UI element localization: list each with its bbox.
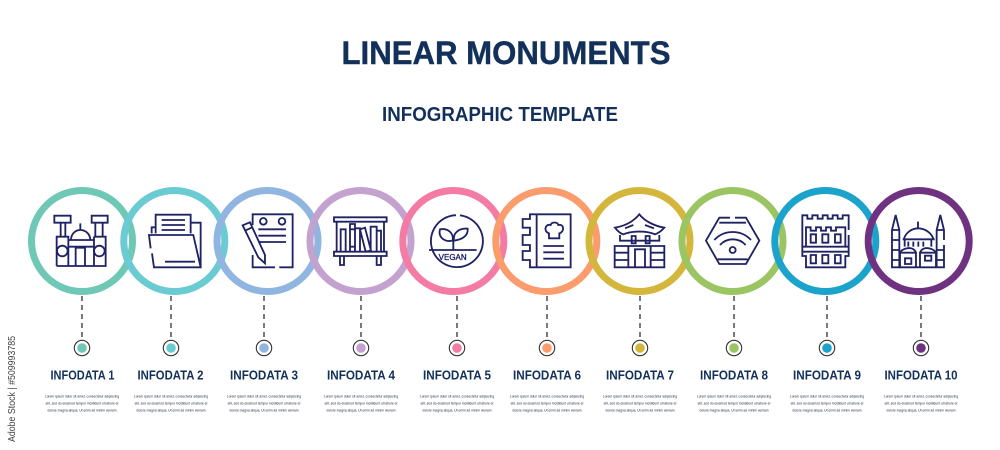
item 8 text bbox=[697, 368, 771, 412]
item 1 text: INFODATA 1 bbox=[50, 368, 114, 382]
item 5 text bbox=[420, 368, 494, 412]
item 3 text bbox=[227, 368, 301, 412]
item 7 text bbox=[603, 368, 677, 412]
item 9 text: Lorem ipsum dolor sit amet, consectetur adipiscing bbox=[790, 394, 864, 398]
item 7 text: elit, sed do eiusmod tempor incididunt ut labore et bbox=[604, 402, 676, 406]
icon: bookshelf bbox=[334, 217, 387, 265]
icon: vegan badge bbox=[429, 215, 483, 267]
item 2 text bbox=[134, 368, 208, 412]
icon: notepad and pencil bbox=[243, 214, 293, 267]
item 5 text: INFODATA 5 bbox=[423, 368, 491, 382]
item 6 text: INFODATA 6 bbox=[513, 368, 581, 382]
item 3 text: INFODATA 3 bbox=[230, 368, 298, 382]
item 10 text: dolore magna aliqua. Ut enim ad minim veniam bbox=[887, 408, 956, 412]
item 6 text: Lorem ipsum dolor sit amet, consectetur adipiscing bbox=[510, 394, 584, 398]
icon: ottoman mosque bbox=[892, 215, 944, 267]
item 2 text: dolore magna aliqua. Ut enim ad minim veniam bbox=[137, 408, 206, 412]
icon: fortress tower bbox=[802, 215, 849, 267]
item 9 text: dolore magna aliqua. Ut enim ad minim veniam bbox=[793, 408, 862, 412]
item 8 text: dolore magna aliqua. Ut enim ad minim veniam bbox=[700, 408, 769, 412]
subtitle: INFOGRAPHIC TEMPLATE bbox=[382, 104, 618, 126]
item 3 text: elit, sed do eiusmod tempor incididunt ut labore et bbox=[228, 402, 300, 406]
item 5 text: elit, sed do eiusmod tempor incididunt ut labore et bbox=[421, 402, 493, 406]
item 2 text: Lorem ipsum dolor sit amet, consectetur adipiscing bbox=[134, 394, 208, 398]
icon: korean palace gate bbox=[615, 214, 664, 267]
item 1 text bbox=[45, 368, 119, 412]
item 8 text: elit, sed do eiusmod tempor incididunt ut labore et bbox=[698, 402, 770, 406]
icon: recipe book bbox=[523, 214, 571, 267]
item 4 text bbox=[324, 368, 398, 412]
item 9 text: INFODATA 9 bbox=[793, 368, 861, 382]
item 10 text: Lorem ipsum dolor sit amet, consectetur adipiscing bbox=[884, 394, 958, 398]
stock credit: Adobe Stock | #509993785 bbox=[6, 336, 18, 442]
item 3 text: Lorem ipsum dolor sit amet, consectetur adipiscing bbox=[227, 394, 301, 398]
icon: mosque with clock towers bbox=[54, 216, 108, 266]
item 1 text: elit, sed do eiusmod tempor incididunt ut labore et bbox=[46, 402, 118, 406]
icon: wifi hexagon bbox=[706, 218, 759, 264]
item 7 text: dolore magna aliqua. Ut enim ad minim veniam bbox=[606, 408, 675, 412]
ring chain bbox=[32, 190, 969, 292]
item 1 text: Lorem ipsum dolor sit amet, consectetur adipiscing bbox=[45, 394, 119, 398]
connectors bbox=[82, 296, 921, 338]
item 7 text: Lorem ipsum dolor sit amet, consectetur adipiscing bbox=[603, 394, 677, 398]
item 1 text: dolore magna aliqua. Ut enim ad minim veniam bbox=[48, 408, 117, 412]
item 7 text: INFODATA 7 bbox=[606, 368, 674, 382]
icon: folder bbox=[149, 215, 201, 267]
item 6 text: dolore magna aliqua. Ut enim ad minim veniam bbox=[513, 408, 582, 412]
item 5 text: Lorem ipsum dolor sit amet, consectetur adipiscing bbox=[420, 394, 494, 398]
item 5 text: dolore magna aliqua. Ut enim ad minim veniam bbox=[423, 408, 492, 412]
vegan label: VEGAN bbox=[439, 253, 467, 262]
item 6 text bbox=[510, 368, 584, 412]
item 9 text: elit, sed do eiusmod tempor incididunt ut labore et bbox=[791, 402, 863, 406]
item 2 text: INFODATA 2 bbox=[138, 368, 204, 382]
item 4 text: Lorem ipsum dolor sit amet, consectetur adipiscing bbox=[324, 394, 398, 398]
item 8 text: Lorem ipsum dolor sit amet, consectetur adipiscing bbox=[697, 394, 771, 398]
item 3 text: dolore magna aliqua. Ut enim ad minim veniam bbox=[230, 408, 299, 412]
item 4 text: elit, sed do eiusmod tempor incididunt ut labore et bbox=[325, 402, 397, 406]
item 10 text bbox=[884, 368, 958, 412]
item 4 text: INFODATA 4 bbox=[327, 368, 396, 382]
item 10 text: elit, sed do eiusmod tempor incididunt ut labore et bbox=[885, 402, 957, 406]
title: LINEAR MONUMENTS bbox=[342, 35, 670, 71]
item 4 text: dolore magna aliqua. Ut enim ad minim veniam bbox=[327, 408, 396, 412]
item 6 text: elit, sed do eiusmod tempor incididunt ut labore et bbox=[511, 402, 583, 406]
item 8 text: INFODATA 8 bbox=[700, 368, 768, 382]
item 2 text: elit, sed do eiusmod tempor incididunt ut labore et bbox=[135, 402, 207, 406]
item 9 text bbox=[790, 368, 864, 412]
item 10 text: INFODATA 10 bbox=[884, 368, 958, 382]
marker dots bbox=[74, 340, 929, 356]
